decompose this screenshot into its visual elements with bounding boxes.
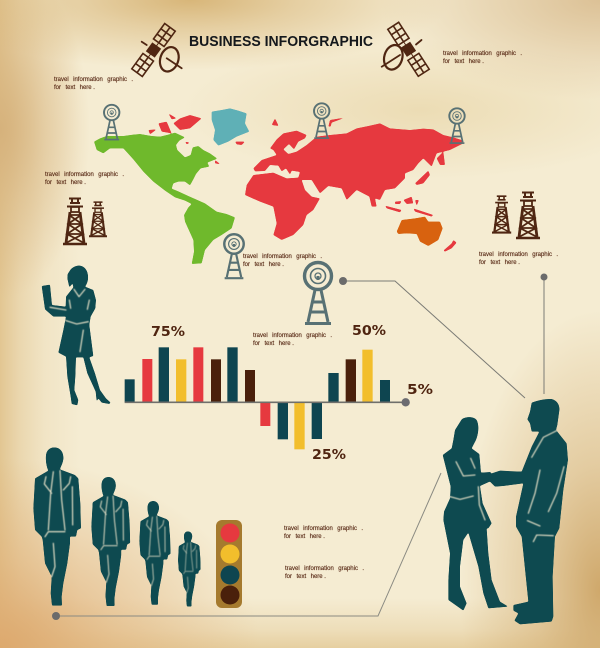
text: left note: travel information graphic . bbox=[45, 172, 124, 178]
man three bbox=[139, 501, 171, 605]
text: bottom note one bbox=[284, 526, 363, 540]
connector: antenna to handshake bbox=[339, 277, 525, 398]
connector: bottom line to handshake bbox=[52, 473, 441, 620]
world map bbox=[94, 108, 463, 264]
map: Eurasia and Africa bbox=[245, 123, 463, 240]
text: top right note: travel information graphic . bbox=[443, 51, 522, 57]
bar chart bbox=[125, 347, 410, 449]
bars below axis bbox=[260, 402, 322, 449]
text: bottom note two: for text here . bbox=[285, 574, 326, 580]
man four bbox=[178, 531, 201, 607]
icon: right satellite bbox=[381, 22, 429, 76]
silhouette: row of four men bbox=[33, 447, 201, 607]
map: red islands bbox=[148, 113, 457, 252]
icon: large antenna bbox=[304, 262, 332, 324]
text: map note: travel information graphic . bbox=[243, 254, 322, 260]
icon: antenna europe bbox=[314, 103, 329, 138]
traffic light bbox=[216, 520, 242, 608]
bars above axis, left group bbox=[125, 347, 255, 402]
silhouette: woman with laptop bbox=[42, 266, 111, 405]
text: left note bbox=[45, 172, 124, 186]
text: bottom note one: for text here . bbox=[284, 534, 325, 540]
text: top left note: travel information graphic . bbox=[54, 77, 133, 83]
text: chart note: for text here . bbox=[253, 341, 294, 347]
label 5%: 5% bbox=[407, 382, 434, 398]
icon: antenna south america bbox=[224, 234, 244, 278]
map: the Americas bbox=[94, 133, 235, 264]
map: Australia bbox=[397, 217, 443, 246]
text: bottom note two: travel information graphic . bbox=[285, 566, 364, 572]
chart axis bbox=[125, 398, 410, 406]
text: chart note: travel information graphic . bbox=[253, 333, 332, 339]
text: top left note bbox=[54, 77, 133, 91]
businesswoman bbox=[443, 417, 508, 611]
icon: left oil towers bbox=[63, 198, 107, 244]
bars above axis, right group bbox=[328, 350, 390, 402]
text: left note: for text here . bbox=[45, 180, 86, 186]
text: top left note: for text here . bbox=[54, 85, 95, 91]
icon: left satellite bbox=[132, 24, 182, 76]
icon: antenna asia bbox=[449, 108, 465, 143]
label 75%: 75% bbox=[151, 324, 185, 340]
text: top right note bbox=[443, 51, 522, 65]
label 50%: 50% bbox=[352, 323, 386, 339]
label 25%: 25% bbox=[312, 447, 346, 463]
text: map note: for text here . bbox=[243, 262, 284, 268]
text: right note: for text here . bbox=[479, 260, 520, 266]
text: right note bbox=[479, 252, 558, 266]
text: bottom note two bbox=[285, 566, 364, 580]
text: right note: travel information graphic . bbox=[479, 252, 558, 258]
text: bottom note one: travel information graphic . bbox=[284, 526, 363, 532]
icon: antenna north america bbox=[104, 105, 119, 140]
man one bbox=[33, 447, 81, 606]
businessman bbox=[488, 399, 568, 624]
silhouette: handshake bbox=[443, 399, 568, 624]
text: map note bbox=[243, 254, 322, 268]
map: Greenland bbox=[212, 108, 249, 146]
icon: right oil towers bbox=[492, 192, 540, 238]
text: chart note bbox=[253, 333, 332, 347]
man two bbox=[91, 477, 130, 606]
text: top right note: for text here . bbox=[443, 59, 484, 65]
title: BUSINESS INFORGRAPHIC bbox=[189, 34, 373, 50]
connector: right note to handshake bbox=[540, 274, 548, 394]
